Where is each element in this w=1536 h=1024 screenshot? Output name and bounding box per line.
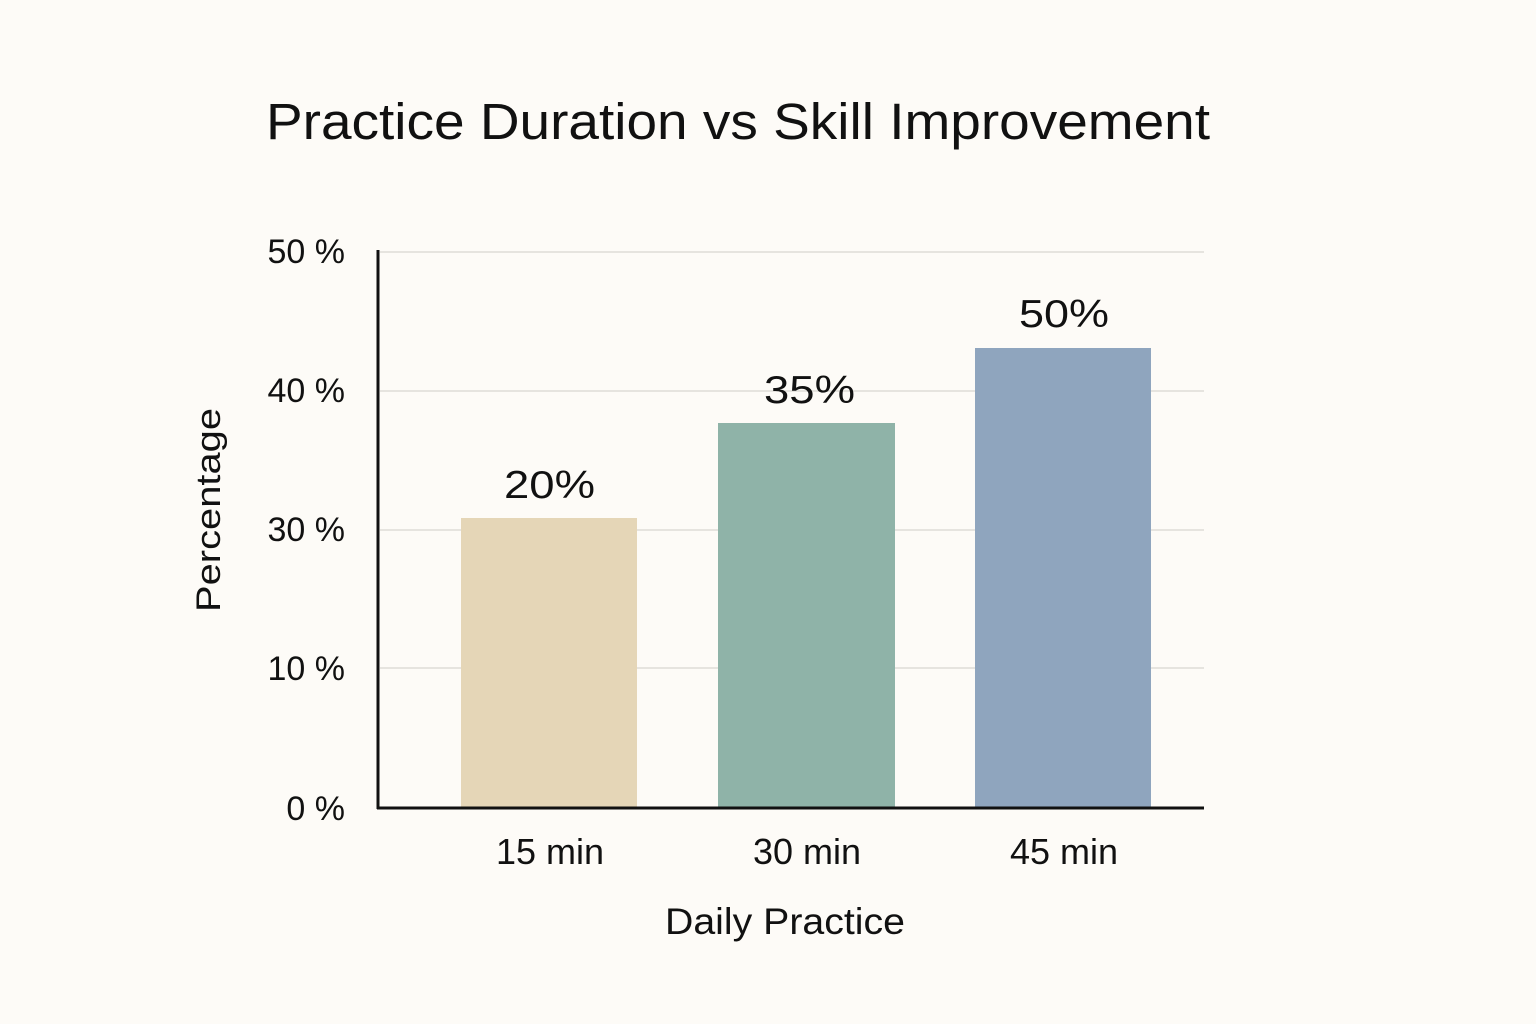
x axis labels: 45 min [1010, 831, 1118, 872]
value labels: 50% [1019, 293, 1109, 336]
axes [377, 250, 1204, 809]
y axis labels: 40 % [268, 372, 345, 410]
x axis labels: 30 min [753, 831, 861, 872]
y axis labels: 0 % [286, 790, 345, 828]
value labels [504, 293, 1109, 507]
x axis title: Daily Practice [665, 901, 905, 942]
y axis labels [268, 233, 345, 828]
bar: 30 min [718, 423, 895, 808]
y axis labels: 30 % [268, 511, 345, 549]
title: Practice Duration vs Skill Improvement [266, 93, 1210, 150]
x axis labels [496, 831, 1118, 872]
y axis title: Percentage [190, 408, 228, 612]
value labels: 20% [504, 464, 595, 507]
x axis labels: 15 min [496, 831, 604, 872]
y axis labels: 50 % [268, 233, 345, 271]
bar: 15 min [461, 518, 637, 808]
value labels: 35% [764, 369, 855, 412]
bar: 45 min [975, 348, 1151, 808]
y axis labels: 10 % [268, 650, 345, 688]
